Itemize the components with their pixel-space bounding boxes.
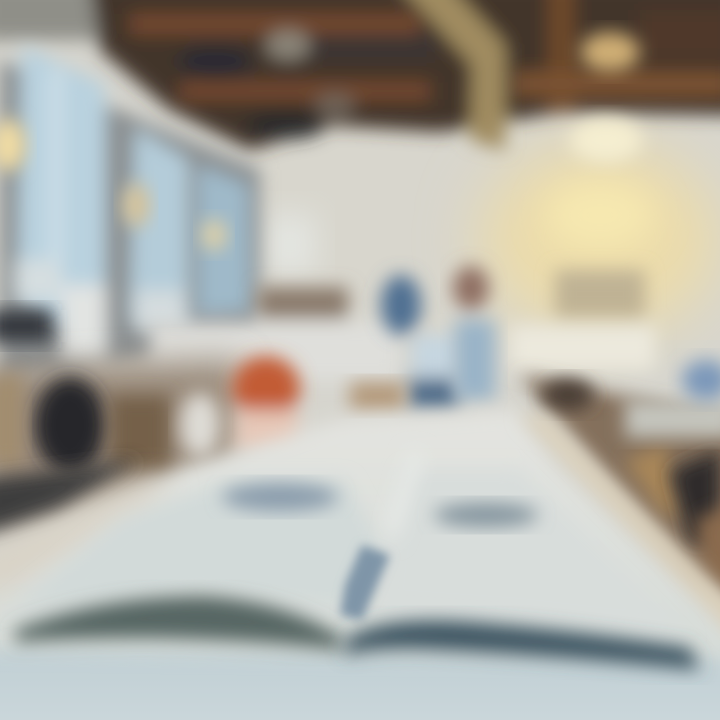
- book: left lower edge shadow: [15, 596, 345, 650]
- table left edge warm tint: [0, 480, 170, 600]
- person: red figure: [232, 356, 300, 454]
- book: right page: [380, 470, 690, 640]
- table right edge highlight: [520, 415, 720, 640]
- floor strip: [0, 640, 720, 720]
- left foreground furniture: [0, 310, 240, 535]
- book: left text block: [222, 483, 338, 511]
- open book: [10, 450, 700, 670]
- people in background: [232, 266, 495, 454]
- right chairs and furniture: [520, 360, 720, 610]
- warm lamps: [0, 119, 26, 171]
- book: left page: [10, 480, 385, 610]
- ceiling: [0, 0, 720, 150]
- book: centre spine and bookmark: [340, 545, 390, 620]
- shelves and artwork on back wall: [150, 270, 655, 380]
- person: blue figure: [381, 275, 458, 408]
- person: second figure: [453, 266, 495, 400]
- left wall and windows: [0, 45, 260, 380]
- book: right text block: [434, 503, 538, 527]
- table surface: [0, 410, 720, 660]
- book: right lower edge shadow: [345, 620, 700, 670]
- ceiling lights: [570, 32, 642, 162]
